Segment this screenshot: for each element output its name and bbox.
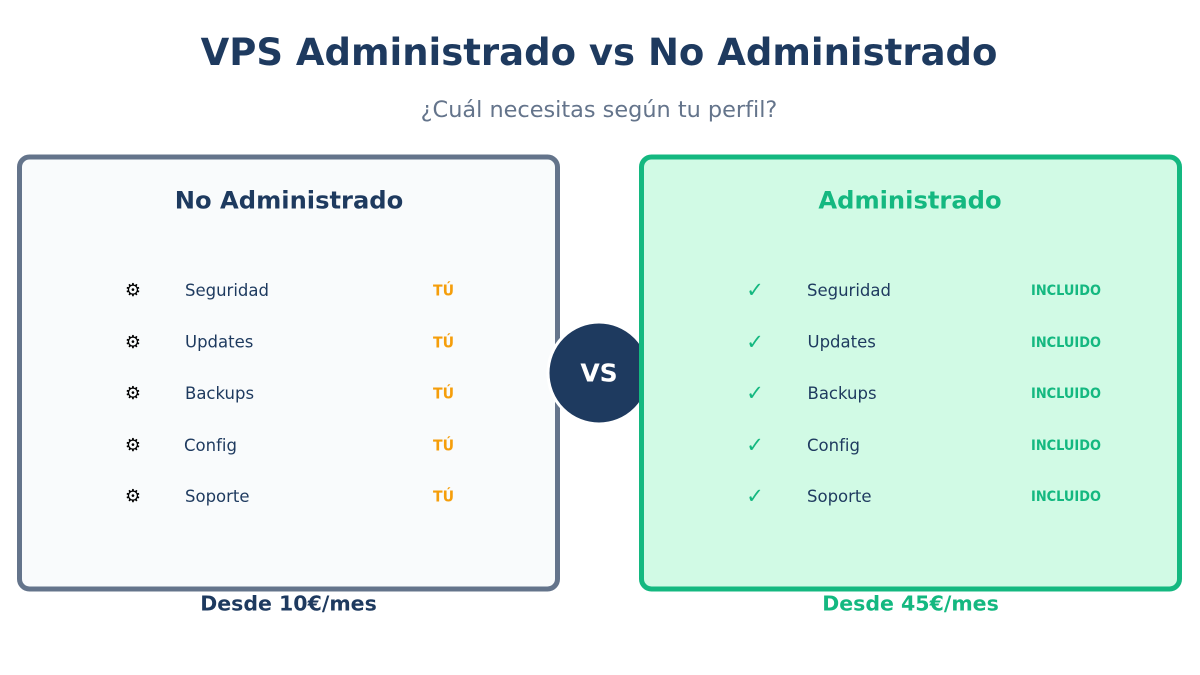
row: backups: ⚙ xyxy=(125,383,141,404)
row: config xyxy=(125,435,454,456)
row: config: TÚ xyxy=(433,436,454,454)
row: config: ⚙ xyxy=(125,435,141,456)
row: config: Config xyxy=(184,436,237,455)
row: backups: TÚ xyxy=(433,384,454,402)
title: VPS Administrado vs No Administrado xyxy=(201,31,997,74)
row: backups xyxy=(746,381,1101,405)
row: soporte: ✓ xyxy=(746,484,764,508)
row: seguridad: INCLUIDO xyxy=(1031,283,1101,299)
row: soporte: Soporte xyxy=(807,487,872,506)
row: backups: ✓ xyxy=(746,381,764,405)
row: soporte: ⚙ xyxy=(125,486,141,507)
row: seguridad: TÚ xyxy=(433,280,454,300)
subtitle: ¿Cuál necesitas según tu perfil? xyxy=(421,97,777,123)
row: updates: INCLUIDO xyxy=(1031,335,1101,351)
row: seguridad: ⚙ xyxy=(125,280,141,301)
row: updates: ✓ xyxy=(746,330,764,354)
row: updates xyxy=(746,330,1101,354)
row: updates: TÚ xyxy=(433,332,454,352)
row: config xyxy=(746,433,1101,457)
row: config: ✓ xyxy=(746,433,764,457)
row: soporte: INCLUIDO xyxy=(1031,489,1101,505)
row: config: Config xyxy=(807,436,860,455)
row: backups: Backups xyxy=(808,384,877,403)
panel: administrado xyxy=(642,157,1180,589)
row: seguridad: Seguridad xyxy=(185,281,269,300)
row: soporte: Soporte xyxy=(185,487,250,506)
panel heading: no administrado: No Administrado xyxy=(175,186,403,214)
vs badge: VS xyxy=(580,358,618,388)
row: seguridad: Seguridad xyxy=(807,281,891,300)
row: updates: ⚙ xyxy=(125,332,141,353)
vs badge xyxy=(548,322,650,424)
row: soporte: TÚ xyxy=(433,486,454,506)
row: seguridad xyxy=(125,280,454,301)
row: backups: Backups xyxy=(185,384,254,403)
row: updates: Updates xyxy=(808,332,876,352)
panel heading: administrado: Administrado xyxy=(818,186,1002,214)
row: updates: Updates xyxy=(185,332,253,352)
row: seguridad: ✓ xyxy=(746,278,764,302)
row: backups xyxy=(125,383,454,404)
row: soporte xyxy=(746,484,1101,508)
panel: no administrado xyxy=(20,157,558,589)
row: soporte xyxy=(125,486,454,507)
price: no administrado: Desde 10€/mes xyxy=(200,592,377,616)
row: backups: INCLUIDO xyxy=(1031,386,1101,402)
row: config: INCLUIDO xyxy=(1031,438,1101,454)
price: administrado: Desde 45€/mes xyxy=(822,592,999,616)
row: seguridad xyxy=(746,278,1101,302)
row: updates xyxy=(125,332,454,353)
